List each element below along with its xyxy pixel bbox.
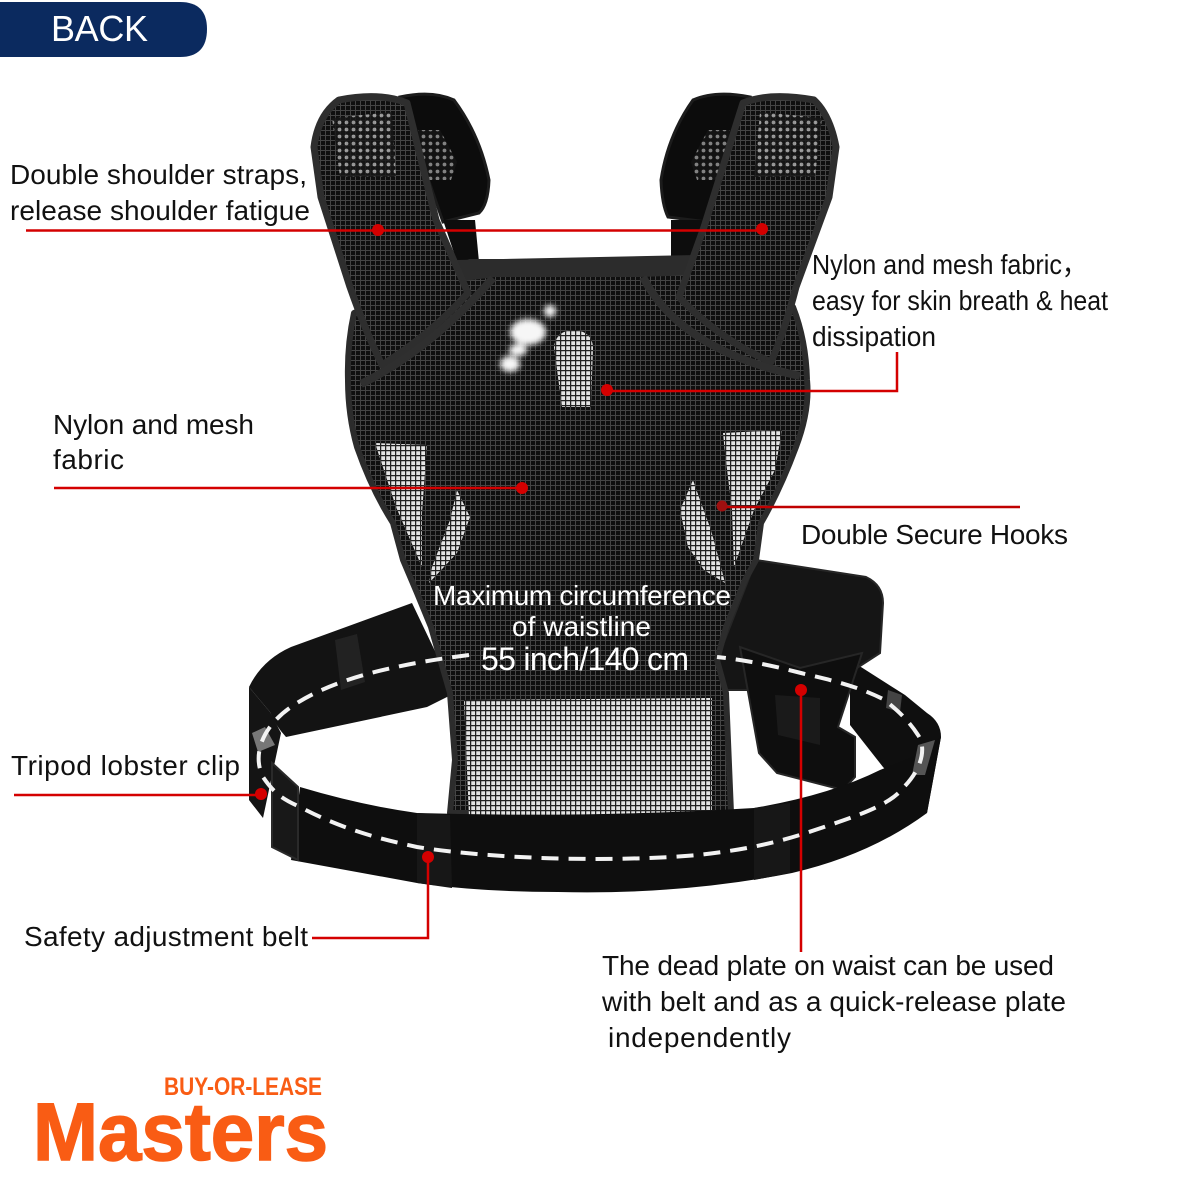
right strap arc — [643, 277, 800, 376]
label: nylon and mesh fabric — [53, 409, 528, 494]
right loop mesh — [691, 130, 730, 180]
label: nylon and mesh fabric, breathable — [601, 249, 1108, 396]
right webbing — [671, 220, 704, 262]
header tab: BACK — [0, 2, 207, 57]
label: dead plate on waist: independently — [608, 1022, 791, 1053]
right strap dotted mesh — [754, 112, 822, 177]
left rear shoulder loop — [400, 94, 489, 222]
upper right buckle — [886, 690, 902, 712]
white mesh center tab — [554, 330, 593, 407]
label: nylon and mesh fabric: fabric — [53, 444, 124, 475]
left strap dotted mesh — [332, 112, 396, 177]
label: double shoulder straps: Double shoulder straps, — [10, 159, 307, 190]
front waist belt — [291, 737, 941, 892]
white mesh left sliver — [429, 490, 470, 583]
dashed waistline — [259, 655, 922, 859]
waistline caption: Maximum circumference — [433, 580, 731, 611]
belt sleeve — [417, 813, 452, 888]
right back belt strap — [850, 660, 941, 813]
white mesh right sliver — [680, 480, 725, 583]
label: tripod lobster clip — [11, 750, 267, 800]
label: dead plate on waist: with belt and as a quick-release plate — [601, 986, 1066, 1017]
top band — [457, 255, 696, 282]
left webbing — [443, 220, 479, 262]
label: nylon and mesh fabric: Nylon and mesh — [53, 409, 254, 440]
header tab: BACK: BACK — [51, 8, 148, 49]
logo: Buy-or-Lease Masters: Masters — [33, 1087, 328, 1178]
pad on back belt — [335, 634, 365, 690]
waistline caption — [433, 580, 731, 677]
label: dead plate on waist — [601, 684, 1066, 1053]
label: safety adjustment belt — [24, 851, 434, 952]
left shoulder strap — [314, 97, 468, 365]
waistline caption: of waistline — [512, 611, 651, 642]
label: double secure hooks — [716, 500, 1068, 550]
belt sleeve right — [754, 803, 790, 880]
quick-release plate — [740, 647, 862, 790]
waistline caption: 55 inch/140 cm — [481, 641, 689, 677]
right shoulder strap — [679, 97, 836, 362]
back waist belt — [249, 603, 455, 737]
label: nylon and mesh fabric, breathable: easy for skin breath & heat — [812, 285, 1108, 316]
label: nylon and mesh fabric, breathable: dissipation — [812, 321, 936, 352]
left strap arc — [361, 278, 493, 384]
velcro strip on plate — [775, 695, 820, 745]
label: double secure hooks: Double Secure Hooks — [801, 519, 1068, 550]
label: double shoulder straps — [10, 159, 768, 236]
label: double shoulder straps: release shoulder fatigue — [10, 195, 310, 226]
waist pouch — [717, 560, 883, 690]
logo: Buy-or-Lease Masters: BUY-OR-LEASE — [164, 1073, 322, 1101]
reflective glare — [500, 305, 556, 372]
white mesh right side — [723, 430, 782, 567]
white mesh patch lower back — [464, 698, 712, 817]
label: tripod lobster clip: Tripod lobster clip — [11, 750, 240, 781]
buckle highlight — [252, 727, 275, 752]
left buckle and clip — [249, 687, 281, 818]
main back panel — [348, 262, 808, 813]
vest product illustration — [249, 94, 941, 892]
label: nylon and mesh fabric, breathable: Nylon and mesh fabric， — [812, 249, 1087, 280]
label: dead plate on waist: The dead plate on waist can be used — [602, 950, 1054, 981]
white mesh left side — [375, 443, 427, 567]
left loop mesh — [418, 130, 457, 180]
buckle bracket — [272, 763, 298, 860]
label: safety adjustment belt: Safety adjustment belt — [24, 921, 308, 952]
right rear shoulder loop — [661, 94, 750, 222]
right buckle — [912, 740, 935, 775]
